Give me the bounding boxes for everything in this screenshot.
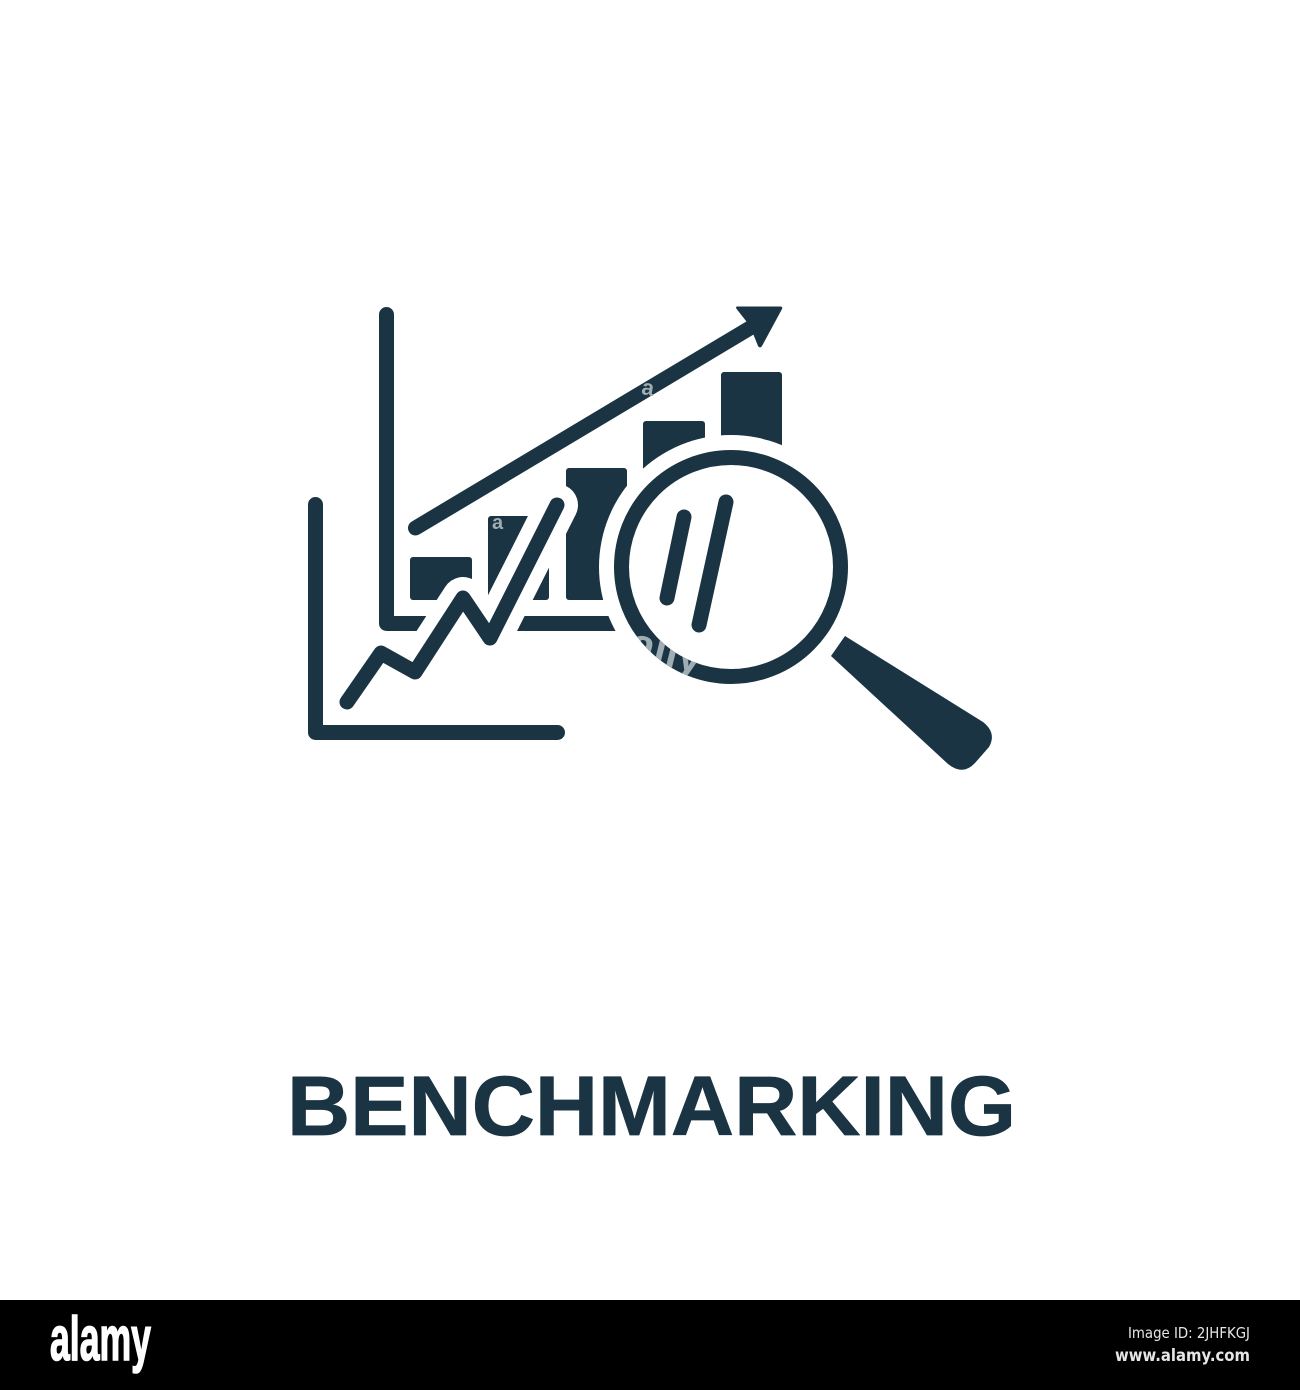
- back chart axis: [386, 314, 625, 624]
- watermark marks: a: [492, 512, 504, 534]
- watermark marks: a: [640, 374, 657, 401]
- magnifier knockout: [599, 435, 863, 699]
- bar chart columns: [410, 372, 782, 602]
- infographic canvas: [0, 306, 1300, 1390]
- magnifier ring: [622, 458, 840, 676]
- image id: Image ID: 2JHFKGJ: [1128, 1324, 1250, 1342]
- front chart axis: [316, 504, 558, 732]
- watermark marks: ally: [625, 618, 709, 684]
- watermark marks: [492, 383, 696, 676]
- magnifier handle: [831, 636, 992, 770]
- title: BENCHMARKING: [287, 1059, 1016, 1153]
- zigzag line knockout: [347, 505, 557, 702]
- zigzag trend line: [347, 505, 557, 702]
- alamy logo: alamy: [50, 1305, 151, 1374]
- trend arrow: [416, 306, 782, 528]
- website: www.alamy.com: [1115, 1346, 1250, 1365]
- icon: benchmarking chart with magnifier: [316, 306, 992, 770]
- footer bar: [0, 1300, 1300, 1390]
- magnifier glare lines: [667, 502, 726, 625]
